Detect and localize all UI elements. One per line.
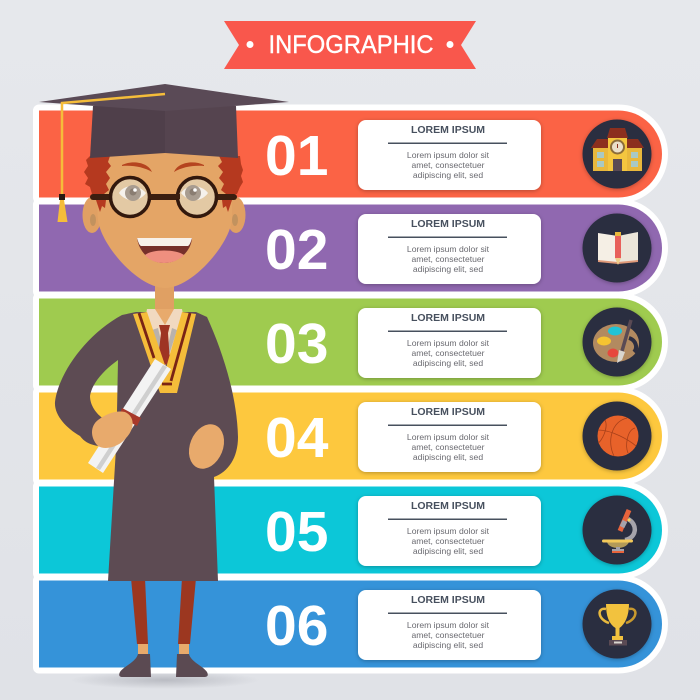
text card 05: Lorem ipsum dolor sit <box>407 526 490 536</box>
left hand <box>92 411 133 448</box>
text card 02: amet, consectetuer <box>411 254 485 264</box>
text card 06: adipiscing elit, sed <box>413 640 483 650</box>
diploma <box>88 359 171 473</box>
text card 03: adipiscing elit, sed <box>413 358 483 368</box>
panel: step 04 <box>39 392 662 480</box>
text card 05 <box>358 496 541 566</box>
title banner <box>224 21 476 69</box>
icon: paint palette <box>582 308 652 376</box>
text card 05: amet, consectetuer <box>411 536 485 546</box>
ground shadow <box>70 671 260 689</box>
panel: step 01 <box>39 110 662 198</box>
text card 04: Lorem ipsum dolor sit <box>407 432 490 442</box>
ears <box>82 197 102 233</box>
text card 03: amet, consectetuer <box>411 348 485 358</box>
text card 02: LOREM IPSUM <box>411 218 485 230</box>
text card 06 <box>358 590 541 660</box>
text card 03: LOREM IPSUM <box>411 312 485 324</box>
text card 03 <box>358 308 541 378</box>
text card 02: Lorem ipsum dolor sit <box>407 244 490 254</box>
text card 03: Lorem ipsum dolor sit <box>407 338 490 348</box>
panel: step 05 <box>39 486 662 574</box>
text card 06: Lorem ipsum dolor sit <box>407 620 490 630</box>
tassel <box>58 94 165 222</box>
text card 06: amet, consectetuer <box>411 630 485 640</box>
gold collar stole <box>133 312 196 393</box>
text card 04: adipiscing elit, sed <box>413 452 483 462</box>
text card 01: amet, consectetuer <box>411 160 485 170</box>
eyebrows <box>122 162 152 172</box>
text card 02 <box>358 214 541 284</box>
text card 05: LOREM IPSUM <box>411 500 485 512</box>
panel: step 06 <box>39 580 662 668</box>
text card 02: adipiscing elit, sed <box>413 264 483 274</box>
shirt and tie <box>143 309 186 368</box>
number 02: 02 <box>265 218 328 282</box>
right hand <box>183 419 230 474</box>
neck <box>155 283 174 313</box>
graduation cap <box>39 84 289 222</box>
panel: step 02 <box>39 204 662 292</box>
text card 05: adipiscing elit, sed <box>413 546 483 556</box>
text card 04 <box>358 402 541 472</box>
hair <box>84 156 243 212</box>
icon: trophy <box>582 590 652 658</box>
icon: school <box>582 120 652 188</box>
panel: step 03 <box>39 298 662 386</box>
text card 06: LOREM IPSUM <box>411 594 485 606</box>
icon: microscope <box>582 496 652 564</box>
number 06: 06 <box>265 594 328 658</box>
icon: basketball <box>582 402 652 470</box>
title: INFOGRAPHIC <box>268 31 434 59</box>
head <box>82 153 246 288</box>
mouth <box>137 238 192 263</box>
legs and shoes <box>119 578 208 677</box>
glasses <box>90 178 237 216</box>
number 03: 03 <box>265 312 328 376</box>
text card 01: adipiscing elit, sed <box>413 170 483 180</box>
gown <box>55 312 238 581</box>
number 05: 05 <box>265 500 328 564</box>
text card 01: LOREM IPSUM <box>411 124 485 136</box>
icon: book and pencil <box>582 214 652 282</box>
number 04: 04 <box>265 406 329 470</box>
text card 01: Lorem ipsum dolor sit <box>407 150 490 160</box>
text card 01 <box>358 120 541 190</box>
number 01: 01 <box>265 124 328 188</box>
text card 04: amet, consectetuer <box>411 442 485 452</box>
graduate character <box>39 84 289 677</box>
face <box>98 153 232 288</box>
text card 04: LOREM IPSUM <box>411 406 485 418</box>
